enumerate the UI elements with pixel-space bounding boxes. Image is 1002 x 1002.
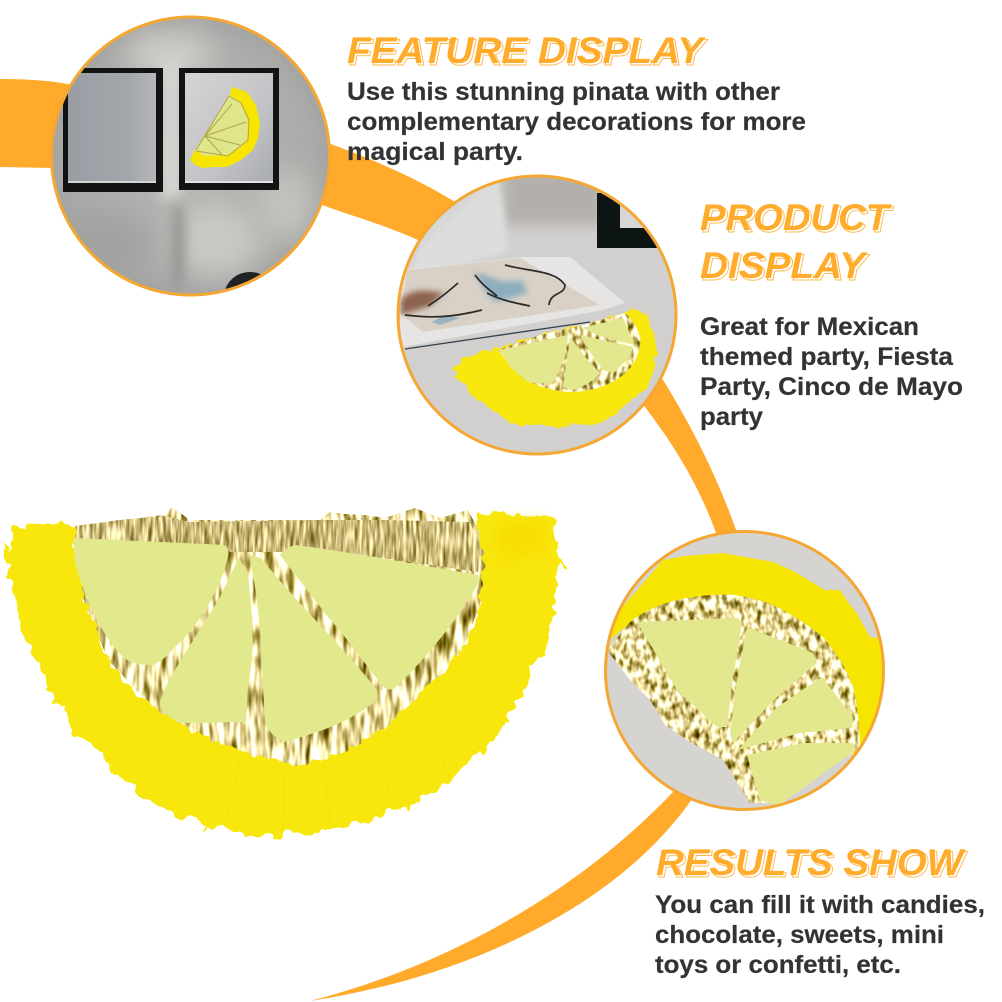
feature display text (347, 78, 806, 166)
right frame with lemon (179, 68, 279, 190)
picture frame in background (597, 193, 662, 248)
results show heading: RESULTS SHOW (656, 842, 966, 883)
product display heading: PRODUCT (702, 199, 894, 240)
results show text (655, 891, 985, 979)
product display text: themed party, Fiesta (700, 343, 954, 371)
product display heading (700, 197, 894, 288)
product display text: Great for Mexican (700, 313, 919, 341)
segment four (280, 545, 479, 690)
gold foil interior (75, 507, 490, 770)
segment two (160, 558, 253, 723)
results show text: You can fill it with candies, (655, 891, 985, 919)
circle photo: framed lemon on wall (50, 15, 332, 322)
main lemon pinata (3, 507, 567, 841)
circle photo: lemon on table with book (396, 170, 678, 456)
gold foil top band (73, 516, 480, 572)
results show heading: RESULTS SHOW (658, 844, 968, 885)
fringe shading (13, 528, 555, 838)
product display text: Party, Cinco de Mayo (700, 373, 963, 401)
results show text: toys or confetti, etc. (655, 951, 901, 979)
feature display text: Use this stunning pinata with other (347, 78, 780, 106)
lemon wedge small (453, 308, 657, 428)
segment three (250, 555, 377, 742)
left empty frame (63, 68, 163, 192)
results show text: chocolate, sweets, mini (655, 921, 944, 949)
feature display text: magical party. (347, 138, 523, 166)
circle photo: lemon close-up (600, 530, 890, 814)
rind with fringe (3, 512, 567, 841)
feature display heading: FEATURE DISPLAY (347, 30, 706, 71)
product display heading: PRODUCT (700, 197, 892, 238)
citrus segments (73, 538, 479, 742)
open book (400, 257, 625, 349)
product display heading: DISPLAY (700, 245, 868, 286)
segment one (73, 538, 228, 665)
citrus segments (637, 618, 853, 806)
rind arc (610, 553, 882, 756)
black object at bottom (226, 272, 261, 289)
product display text: party (700, 403, 763, 431)
foil band (607, 595, 860, 803)
orange ribbon (0, 79, 745, 1001)
feature display heading: FEATURE DISPLAY (349, 32, 708, 73)
product display text (700, 313, 963, 431)
feature display text: complementary decorations for more (347, 108, 806, 136)
product display heading: DISPLAY (702, 247, 870, 288)
